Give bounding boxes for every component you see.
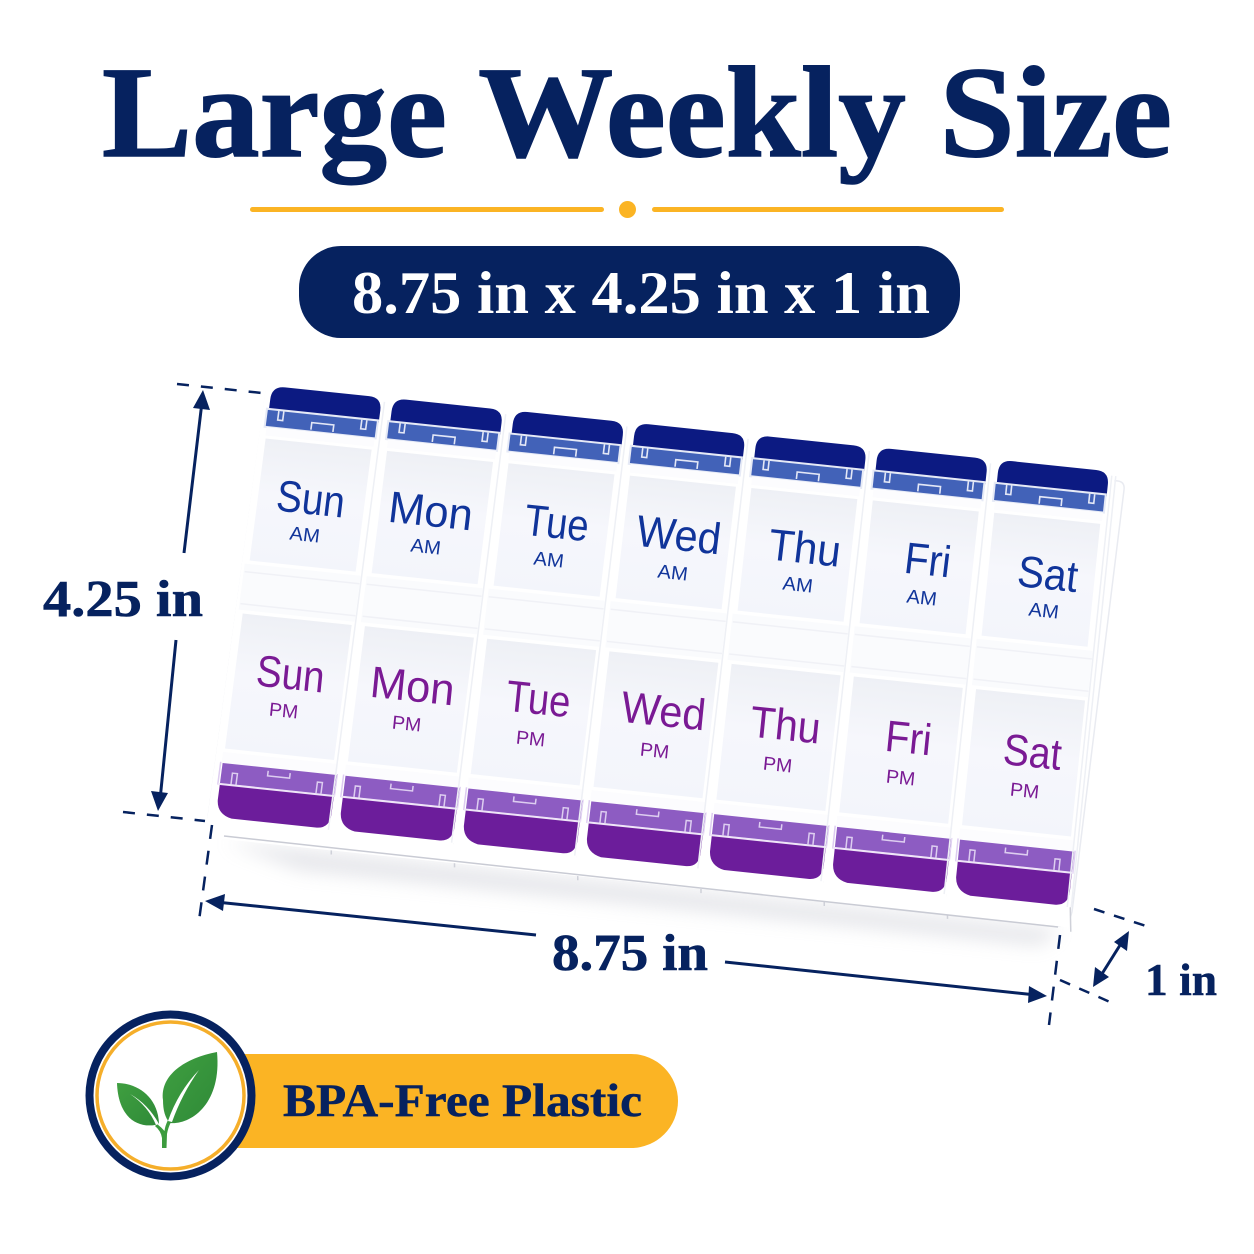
dimension: width: 8.75 in xyxy=(552,925,708,982)
PM labels: Sun xyxy=(254,647,327,703)
tray body xyxy=(208,392,1124,926)
badge: BPA-free xyxy=(90,1014,678,1176)
PM labels: Sat xyxy=(1001,725,1064,780)
AM labels: AM xyxy=(288,524,321,548)
AM labels: Thu xyxy=(766,520,844,577)
AM labels: Mon xyxy=(386,483,476,540)
PM labels: Mon xyxy=(368,658,457,715)
divider xyxy=(250,201,1004,218)
PM labels: PM xyxy=(268,700,299,723)
dimension: height xyxy=(43,384,262,821)
PM labels: PM xyxy=(391,713,422,736)
dimensions pill xyxy=(299,246,960,338)
tray shadow xyxy=(225,842,1060,945)
column: Sunday xyxy=(204,385,391,854)
AM labels: Sat xyxy=(1015,547,1081,602)
PM labels xyxy=(254,647,1064,803)
dimension: depth xyxy=(1060,909,1217,1005)
PM labels: Fri xyxy=(883,712,934,765)
dimensions pill: 8.75 in x 4.25 in x 1 in xyxy=(352,260,930,326)
dimension: width xyxy=(198,825,1060,1025)
pill organizer xyxy=(204,385,1124,945)
dimension: height: 4.25 in xyxy=(43,571,203,628)
AM labels: AM xyxy=(409,536,442,560)
AM labels: Sun xyxy=(274,472,348,528)
PM labels: PM xyxy=(515,728,546,751)
PM labels: Thu xyxy=(748,698,823,754)
title: Large Weekly Size xyxy=(102,41,1172,185)
column: Tuesday xyxy=(451,410,633,880)
PM labels: Wed xyxy=(619,683,708,740)
tray bottom edge xyxy=(224,836,1058,927)
AM labels: AM xyxy=(905,587,938,611)
badge label bar xyxy=(235,1054,678,1148)
AM labels: AM xyxy=(1027,600,1060,624)
AM labels: Wed xyxy=(634,507,724,564)
PM labels: PM xyxy=(1009,780,1040,803)
column: Friday xyxy=(821,447,997,919)
PM labels: Tue xyxy=(504,672,573,727)
AM labels xyxy=(274,472,1081,624)
PM labels: PM xyxy=(885,767,916,790)
badge text: BPA-Free Plastic xyxy=(283,1075,642,1127)
PM labels: PM xyxy=(639,740,670,763)
icon: leaf sprout xyxy=(117,1052,218,1148)
badge circle xyxy=(90,1014,252,1176)
column: Thursday xyxy=(697,434,876,906)
column: Wednesday xyxy=(574,422,755,893)
AM labels: Fri xyxy=(902,534,954,587)
AM labels: AM xyxy=(656,562,689,586)
column: Monday xyxy=(328,397,512,867)
PM labels: PM xyxy=(762,754,793,777)
AM labels: AM xyxy=(781,574,814,598)
dimension: depth: 1 in xyxy=(1145,954,1217,1005)
AM labels: Tue xyxy=(522,496,592,551)
column: Saturday xyxy=(944,459,1118,932)
AM labels: AM xyxy=(532,549,565,573)
